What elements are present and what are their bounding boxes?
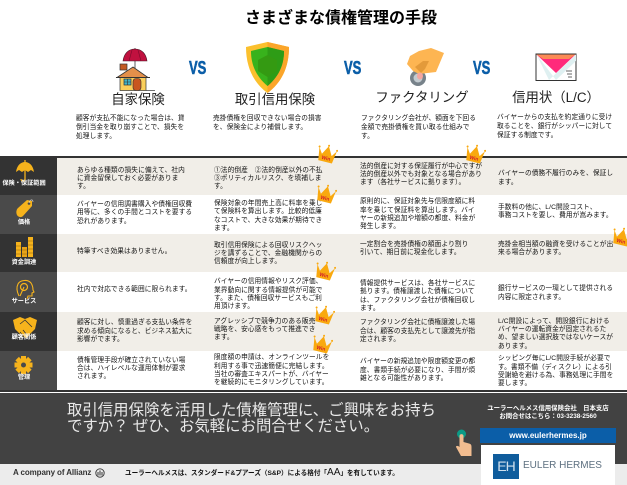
cell: 取引信用保険: 取引信用保険による回収リスクヘッ [214,242,322,248]
cell: 取引信用保険: 信頼度が向上します。 [214,258,281,265]
call to action text [67,403,436,436]
cell: 取引信用保険 [214,317,316,341]
description: 信用状: 保証する制度です。 [497,132,557,138]
icon: shield [246,42,289,93]
cell: ファクタリング: 引いて、期日前に現金化します。 [360,249,461,256]
cell: 取引信用保険: 利用する事で迅速簡便に完結します。 [214,362,329,370]
crown: 資金調達 信用状 [613,228,627,246]
icon: envelope [536,54,576,81]
heading: 取引信用保険: 取引信用保険 [235,92,315,107]
description: 自家保険: 処理します。 [76,132,116,140]
cell: 信用状: L/C開設によって、開設銀行における [498,318,610,324]
cell: ファクタリング: 情報提供サービスは、各社サービスに [360,280,475,287]
cell: 取引信用保険: ジを講ずることで、金融機関からの [214,250,322,257]
description: 取引信用保険: 売掛債権を回収できない場合の損害 [213,114,322,122]
cell: 取引信用保険: 業界動向に関する情報提供が可能で [214,286,323,294]
VS label 1: VS [189,58,206,78]
cell: 取引信用保険: ①法的倒産 ②法的倒産以外の不払 [214,166,323,174]
description: ファクタリング: す。 [361,132,374,140]
label: 顧客関係: 顧客関係 [12,334,36,341]
cell: 取引信用保険 [214,166,323,190]
panel: row サービス [0,272,627,312]
cell: 信用状: め、望ましい選択肢ではないケースが [498,334,613,341]
cell: ファクタリング: 合は、顧客の支払先として譲渡先が指 [360,328,475,334]
cell: 信用状: バイヤーの債務不履行のみを、保証し [498,170,613,177]
cell: 取引信用保険 [214,353,329,386]
description: 取引信用保険: を、保険金により補償します。 [213,124,307,130]
crown: 管理 [311,334,333,354]
title: さまざまな債権管理の手段 [245,10,437,27]
crown: 保険範囲 ファクタリング [466,144,486,164]
cell: ファクタリング: 発生します。 [360,223,400,230]
cell: 信用状: 来る場合があります。 [498,249,565,256]
cell: 自家保険 [77,200,192,225]
cell: ファクタリング: 一定割合を売掛債権の額面より割り [360,241,468,248]
cell: ファクタリング [360,318,475,343]
description: ファクタリング [361,114,476,140]
cell: 取引信用保険: ③ポリティカルリスク、を填補しま [214,175,322,182]
cell: 自家保険: 顧客に対し、慎重過ぎる支払い条件を [77,319,192,326]
cell: 自家保険 [77,318,192,343]
cell: 取引信用保険: て保険料を算出します。比較的低廉 [214,208,322,215]
cell: ファクタリング: 原則的に、保証対象先与信限度額に料 [360,198,475,205]
description: 信用状: 取ることを、銀行がシッパーに対して [497,122,612,130]
description: 信用状: バイヤーからの支払を約定通りに受け [497,114,612,120]
cell: 信用状: 内容に限定されます。 [498,294,565,300]
icon: house with umbrella [116,48,155,91]
cell: 信用状: 売掛金相当額の融資を受けることが出 [498,241,613,248]
label: 価格: 価格 [18,219,30,226]
description: 自家保険 [76,114,185,140]
contact details: ユーラーヘルメス信用保険会社 日本支店 [487,405,609,412]
crown: 顧客関係: Win [318,316,328,324]
row header: 顧客関係 [0,312,57,351]
cell: 自家保険: 恐れがあります。 [77,218,131,225]
VS label 3: VS [473,58,490,78]
cell: ファクタリング: ます（各社サービスに拠ります）。 [360,179,465,186]
crown: 保険範囲 ファクタリング: Win [469,155,479,163]
crown: サービス [314,261,336,281]
cell: 自家保険: 社内で対応できる範囲に限られます。 [77,286,192,293]
cell: 自家保険: あらゆる種類の損失に備えて、社内 [77,166,185,174]
panel: row 保険・保証範囲 [0,158,627,195]
heading: ファクタリング: ファクタリング [375,90,469,105]
call to action text: 取引信用保険を活用した債権管理に、ご興味をお持ち [67,402,436,419]
icon: pointing hand [455,427,473,459]
contact details [470,405,626,421]
logo mark: EH [497,458,515,474]
cell: 信用状 [498,354,613,387]
cell: ファクタリング: 法的倒産以外でも対象となる場合があり [360,171,482,178]
logo mark [493,454,519,479]
cell: 取引信用保険: 保険対象の年間売上高に料率を乗じ [214,200,323,207]
cell: 信用状: 受謝絶を避ける為、事務処理に手間を [498,372,613,379]
Allianz line: A company of Allianz [13,468,91,477]
row header: 資金調達 [0,234,57,272]
icon: hand holding coin [407,48,444,86]
crown: 保険範囲 取引信用保険 [318,144,338,164]
description: 自家保険: 倒引当金を取り崩すことで、損失を [76,124,184,130]
cell: ファクタリング: 率を乗じて保証料を算出します。バイ [360,206,475,214]
icon: price tag [16,200,34,218]
cell: 信用状 [498,284,613,300]
description: ファクタリング: ファクタリング会社が、額面を下回る [361,114,476,122]
cell: 自家保険: 債権管理手段が確立されていない場 [77,356,185,364]
table top rule [0,156,627,158]
crown: 価格: Win [320,195,330,203]
cell: ファクタリング: バイヤーの新規追加や限度額変更の都 [360,358,475,365]
row header: サービス [0,272,57,312]
cell: 自家保険 [77,356,186,380]
website bar [480,428,616,443]
cell: ファクタリング: ファクタリング会社に債権譲渡した場 [360,319,475,326]
cell: 取引信用保険: す。 [214,183,227,190]
cell: 自家保険: に資金留保しておく必要がありま [77,175,178,182]
cell: ファクタリング: 拠ります。債権譲渡した債権について [360,288,475,295]
cell: ファクタリング: 法的倒産に対する保証履行が中心ですが [360,162,482,170]
cell: 取引信用保険: 戦略を、安心感をもって推進でき [214,326,315,333]
icon: head with gear [16,280,35,300]
description: 取引信用保険 [213,114,322,130]
table bottom rule [0,390,627,392]
cell: 自家保険: 特筆すべき効果はありません。 [77,248,171,255]
panel: row 資金調達 [0,234,627,272]
contact details: お問合せはこちら：03-3238-2560 [499,413,597,420]
icon: coin stacks [16,237,33,257]
logo panel: Euler Hermes [481,445,615,485]
cell: 信用状: 要します。 [498,380,531,387]
website bar: www.eulerhermes.jp [509,431,587,440]
panel: row 管理 [0,351,627,390]
cell: 信用状: 事務コストを要し、費用が嵩みます。 [498,212,613,219]
cell: 信用状 [498,240,613,256]
description: 信用状 [497,113,612,138]
call to action text: ですか？ ぜひ、お気軽にお問合せください。 [67,418,379,435]
row header: 保険・保証範囲 [0,158,57,195]
label: サービス: サービス [12,298,36,305]
icon: gear [14,356,32,374]
cell: ファクタリング: 雑となる可能性があります。 [360,375,447,382]
cell: 取引信用保険 [214,277,323,310]
cell: ファクタリング [360,357,475,382]
crown: 価格 [317,184,337,204]
cell: ファクタリング: は、ファクタリング会社が債権回収し [360,297,475,304]
cell: 自家保険: バイヤーの信用調書購入や債権回収費 [77,201,192,208]
panel: call to action band [0,393,627,464]
cell: 取引信用保険: ます。 [214,225,234,232]
cell: 取引信用保険: なコストで、大きな効果が期待でき [214,217,322,224]
rating statement: ユーラーヘルメスは、スタンダード&プアーズ（S&P）による格付「AA」を有しています。 [125,467,399,478]
row header: 管理 [0,351,57,390]
cell: 信用状: 手数料の他に、L/C開設コスト、 [498,204,597,210]
cell: ファクタリング: ヤーの新規追加や増額の都度、料金が [360,215,475,222]
VS label 2: VS [344,58,361,78]
cell: 自家保険: 用等に、多くの手間とコストを要する [77,209,192,216]
cell: 自家保険: されます。 [77,373,110,380]
crown: 管理: Win [316,345,326,353]
cell: 取引信用保険 [214,199,323,232]
row header: 価格 [0,195,57,234]
heading: 信用状（L/C）: 信用状（L/C） [512,90,600,105]
cell: 自家保険 [77,166,185,190]
cell: 取引信用保険: 用頂けます。 [214,303,254,310]
cell: ファクタリング [360,162,482,186]
cell: 信用状 [498,203,613,219]
cell: 信用状: ます。 [498,178,518,186]
label: 保険・保証範囲: 保険・保証範囲 [2,180,46,187]
cell: ファクタリング [360,279,475,312]
crown: 保険範囲 取引信用保険: Win [321,155,331,163]
description: 自家保険: 顧客が支払不能になった場合は、貸 [76,114,185,122]
icon: Allianz emblem [95,468,105,478]
cell: 取引信用保険: アグレッシブで競争力のある販売 [214,318,315,324]
cell: ファクタリング [360,240,468,256]
cell: 取引信用保険: を継続的にモニタリングしています。 [214,379,329,386]
cell: 取引信用保険: 当社の審査エキスパートが、バイヤー [214,371,329,378]
icon: handshake [13,317,37,338]
logo wordmark: EULER HERMES [523,460,602,471]
label: 管理: 管理 [18,374,30,381]
cell: ファクタリング: 定されます。 [360,336,400,343]
cell: ファクタリング: 度、書類手続が必要になり、手間が煩 [360,366,475,374]
cell: ファクタリング [360,197,476,230]
cell: 信用状 [498,317,613,350]
description: ファクタリング: 金額で売掛債権を買い取る仕組みで [361,124,470,130]
label: 資金調達: 資金調達 [12,259,36,266]
cell: 取引信用保険 [214,241,322,265]
panel: row 価格 [0,195,627,234]
cell: 自家保険: 合は、ハイレベルな運用体制が要求 [77,365,185,372]
crown: 資金調達 信用状: Win [616,238,626,246]
cell: 取引信用保険: す。また、債権回収サービスもご利 [214,295,322,302]
cell: 信用状 [498,169,613,186]
icon: umbrella [16,160,34,182]
cell: 取引信用保険: ます。 [214,334,234,341]
cell: 取引信用保険: バイヤーの信用情報やリスク評価、 [214,278,322,285]
footer strip [0,464,627,485]
cell: 信用状: 銀行サービスの一環として提供される [498,285,613,292]
cell: 自家保険: 求める傾向になると、ビジネス拡大に [77,328,192,334]
cell: 信用状: あります。 [498,343,531,350]
cell: ファクタリング: ます。 [360,305,380,312]
cell: 自家保険: す。 [77,183,90,190]
heading: 自家保険: 自家保険 [111,92,165,107]
crown: サービス: Win [319,272,329,280]
cell: 信用状: シッピング毎にL/C開設手続が必要で [498,355,611,362]
panel: row 顧客関係 [0,312,627,351]
cell: 取引信用保険: 限度額の申請は、オンラインツールを [214,354,329,361]
cell: 自家保険: 影響がでます。 [77,336,124,343]
cell: 信用状: バイヤーの運転資金が固定されるた [498,326,606,333]
cell: 信用状: す。書類不備（ディスクレ）による引 [498,364,612,370]
crown: 顧客関係 [313,305,335,325]
